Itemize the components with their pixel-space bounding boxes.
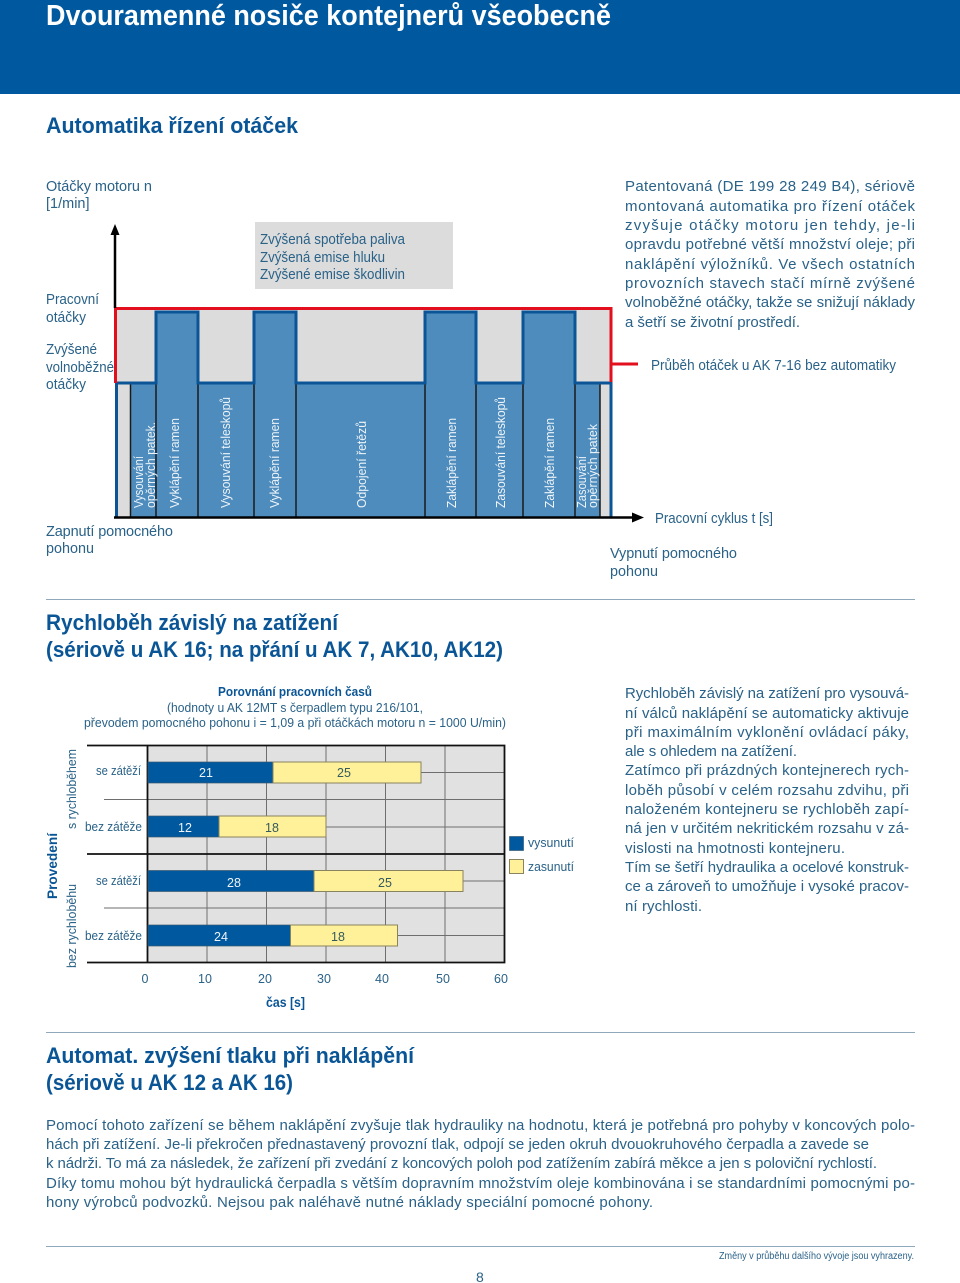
bar values: 25 [378,876,392,890]
rotated phase labels: Zasouvání [574,456,589,508]
chart title: převodem pomocného pohonu i = 1,09 a při otáčkách motoru n = 1000 U/min) [84,716,506,730]
bar values: 12 [178,821,192,835]
group labels: Provedení [44,832,60,899]
heading: load-dependent fast speed: Rychloběh závislý na zatížení [46,610,339,635]
paragraph: pressure increase description: hách při zatížení. Je-li překročen přednastavený provozní tlak, odpojí se jeden okruh dvouokruhového čerpadla a zavede se [46,1136,869,1153]
x axis ticks: 30 [317,972,331,986]
blue working phases [130,311,600,517]
x axis label: Pracovní cyklus t [s] [655,511,773,527]
rotated phase labels: Zaklápění ramen [542,418,557,508]
caption: speed curve: Průběh otáček u AK 7-16 bez automatiky [651,358,897,374]
row labels: se zátěží [96,874,141,888]
label: aux drive on [46,524,173,557]
x axis ticks: 50 [436,972,450,986]
paragraph: fast speed description: Zatímco při prázdných kontejnerech rych- [625,762,909,779]
paragraph: fast speed description: při maximálním vyklonění ovládací páky, [625,724,909,741]
y axis labels: otáčky [46,310,87,326]
legend: zasunutí [528,860,575,874]
paragraph: fast speed description: loběh působí v celém rozsahu zdvihu, při [625,782,909,799]
plot area [148,746,504,962]
paragraph: fast speed description: ní rychlosti. [625,898,702,915]
y axis labels: Otáčky motoru n [46,179,152,195]
chart background areas [115,308,611,517]
legend [510,836,575,874]
heading: load-dependent fast speed [46,610,503,662]
label: aux drive off: pohonu [610,564,658,580]
paragraph: fast speed description: Rychloběh závislý na zatížení pro vysouvá- [625,685,909,702]
header band: Dvouramenné nosiče kontejnerů všeobecně [46,0,611,32]
group labels [44,749,79,968]
header band [0,0,960,94]
x axis ticks [142,972,508,986]
y axis labels: Zvýšené [46,342,97,358]
paragraph: automatic speed control: provozních stavech stačí mírně zvýšené [625,275,915,292]
row labels: bez zátěže [85,929,142,943]
y axis labels: [1/min] [46,196,90,212]
footer note: Změny v průběhu dalšího vývoje jsou vyhrazeny. [719,1250,914,1262]
label: aux drive on: Zapnutí pomocného [46,524,173,540]
paragraph: fast speed description: ná jen v určitém nekritickém rozsahu v zá- [625,820,909,837]
paragraph: fast speed description: vislosti na hmotnosti kontejneru. [625,840,845,857]
paragraph: automatic speed control: opravdu potřebné větší množství oleje; při [625,236,915,253]
heading: automatic pressure increase: Automat. zvýšení tlaku při naklápění [46,1043,415,1068]
paragraph: automatic speed control: volnoběžné otáčky, takže se snižují náklady [625,294,916,311]
rotated phase labels: Vyklápění ramen [167,418,182,508]
divider [46,1032,915,1033]
rotated phase labels: opěrných patek. [143,422,158,508]
paragraph: automatic speed control: a šetří se životní prostředí. [625,314,800,331]
y axis labels: volnoběžné [46,360,114,376]
x axis ticks: 0 [142,972,149,986]
rotated phase labels: opěrných patek [585,424,600,508]
bar values: 21 [199,766,213,780]
frame [87,746,504,962]
group labels: bez rychloběhu [65,884,79,968]
divider [46,1246,915,1247]
chart title [84,685,506,730]
phase separators [130,384,600,517]
row labels: bez zátěže [85,820,142,834]
paragraph: fast speed description [625,685,909,915]
rotated phase labels [131,397,600,508]
callout: higher consumption: Zvýšená spotřeba paliva [260,232,406,248]
paragraph: pressure increase description: k nádrži. To má za následek, že zařízení při zvedání z koncových poloh pod zatížením zabírá měkce a jen s poloviční rychlostí. [46,1155,877,1172]
paragraph: fast speed description: ní válců naklápění se automaticky aktivuje [625,705,909,722]
paragraph: pressure increase description: Díky tomu mohou být hydraulická čerpadla s větším dopravním množstvím oleje kombinována i se standardními pomocnými po- [46,1175,915,1192]
bar values: 28 [227,876,241,890]
label: aux drive off [610,546,737,580]
bar chart: working times [44,746,575,1010]
paragraph: fast speed description: ale s ohledem na zatížení. [625,743,797,760]
red speed line [116,308,638,383]
label: aux drive on: pohonu [46,541,94,557]
rotated phase labels: Odpojení řetězů [354,421,369,508]
grid lines [104,746,504,962]
heading: Automatika řízení otáček: Automatika řízení otáček [46,113,299,138]
bar values: 24 [214,930,228,944]
rotated phase labels: Zasouvání teleskopů [493,397,508,508]
callout: higher consumption: Zvýšená emise hluku [260,250,385,266]
divider [46,599,915,600]
rotated phase labels: Vysouvání [131,456,146,508]
rotated phase labels: Zaklápění ramen [444,418,459,508]
callout: higher consumption [255,222,453,289]
heading: load-dependent fast speed: (sériově u AK 16; na přání u AK 7, AK10, AK12) [46,637,503,662]
legend: vysunutí [528,836,575,850]
rotated phase labels: Vysouvání teleskopů [218,397,233,508]
chart title: (hodnoty u AK 12MT s čerpadlem typu 216/101, [167,701,423,715]
paragraph: fast speed description: ce a zároveň to umožňuje i vysoké pracov- [625,878,909,895]
paragraph: fast speed description: Tím se šetří hydraulika a ocelové konstruk- [625,859,909,876]
rotated phase labels: Vyklápění ramen [267,418,282,508]
x axis title: čas [s] [266,994,305,1010]
group labels: s rychloběhem [65,749,79,829]
bar values: 25 [337,766,351,780]
paragraph: automatic speed control: zvyšuje otáčky motoru jen tehdy, je-li [625,217,915,234]
paragraph: pressure increase description [46,1117,915,1211]
x axis ticks: 10 [198,972,212,986]
heading: automatic pressure increase [46,1043,415,1095]
y axis labels [46,179,152,393]
heading: automatic pressure increase: (sériově u AK 12 a AK 16) [46,1070,293,1095]
bars: retraction [219,762,463,946]
bar values: 18 [265,821,279,835]
y axis labels: otáčky [46,377,87,393]
x axis ticks: 60 [494,972,508,986]
axes [114,228,634,518]
blue speed line [116,312,611,517]
x axis ticks: 40 [375,972,389,986]
chart title: Porovnání pracovních časů [218,685,372,699]
label: aux drive off: Vypnutí pomocného [610,546,737,562]
y axis labels: Pracovní [46,292,99,308]
paragraph: pressure increase description: Pomocí tohoto zařízení se během naklápění zvyšuje tlak hydrauliky na hodnotu, která je potřebná pro pohyby v koncových polo- [46,1117,915,1134]
paragraph: automatic speed control: naklápění výložníků. Ve všech ostatních [625,256,915,273]
x axis ticks: 20 [258,972,272,986]
paragraph: automatic speed control: montovaná automatika pro řízení otáček [625,198,916,215]
paragraph: fast speed description: naloženém kontejneru se rychloběh zapí- [625,801,909,818]
paragraph: automatic speed control [625,178,916,331]
bar values [178,766,392,944]
row labels [85,764,142,943]
bar values: 18 [331,930,345,944]
bars: extension [148,762,314,946]
row labels: se zátěží [96,764,141,778]
paragraph: pressure increase description: hony výrobců podvozků. Nejsou pak naléhavě nutné náklady speciální pomocné pohony. [46,1194,653,1211]
callout: higher consumption: Zvýšené emise škodlivin [260,267,405,283]
speed chart [46,179,897,580]
paragraph: automatic speed control: Patentovaná (DE 199 28 249 B4), sériově [625,178,915,195]
